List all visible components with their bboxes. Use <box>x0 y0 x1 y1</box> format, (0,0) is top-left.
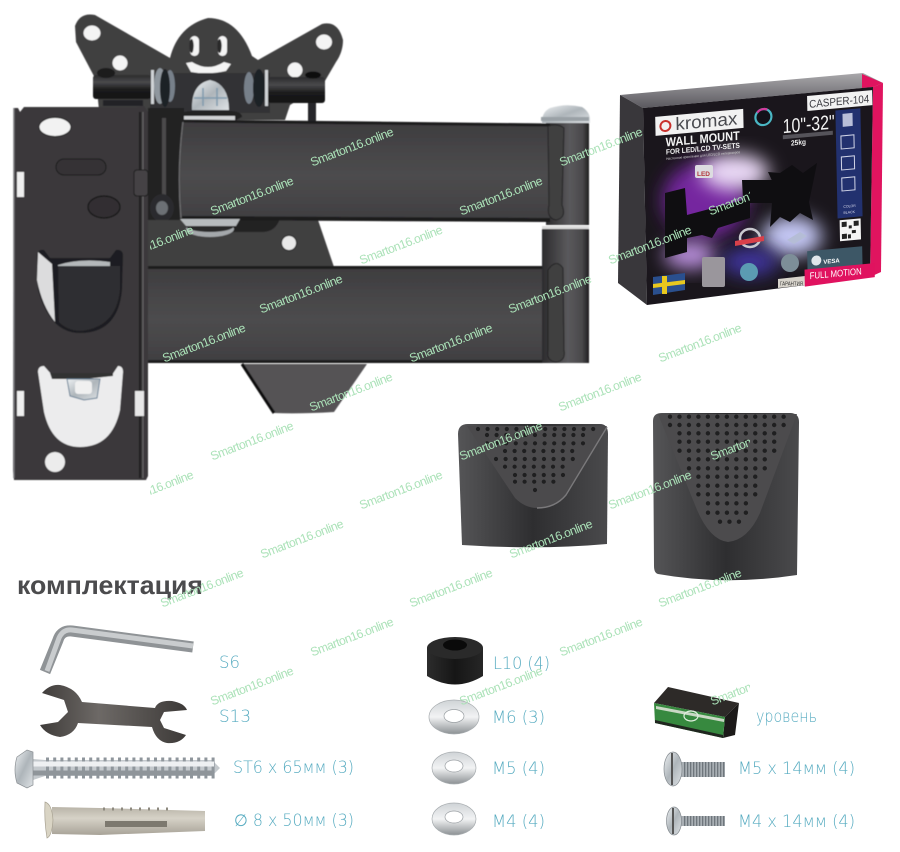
icon: wrench S13 <box>40 685 187 743</box>
watermark layer: Smarton16.online <box>160 321 248 365</box>
watermark layer: Smarton16.online <box>656 321 744 365</box>
keyhole nut <box>67 379 100 400</box>
icon: rubber spacer <box>427 637 483 684</box>
product box <box>618 73 883 305</box>
watermark layer: Smarton16.online <box>208 419 296 463</box>
embossed slot <box>56 159 106 175</box>
QR code <box>840 218 861 241</box>
lower swing arm <box>146 266 552 363</box>
wall mount photo <box>13 14 590 480</box>
side slits <box>17 172 24 197</box>
arm pivot bracket <box>148 108 184 226</box>
watermark layer: Smarton16.online <box>357 468 445 512</box>
fan badge <box>740 263 758 281</box>
box pink side <box>870 83 883 277</box>
Swedish flag <box>653 273 685 295</box>
size underline <box>783 131 833 139</box>
watermark layer: Smarton16.online <box>407 321 495 365</box>
box left side <box>618 95 647 305</box>
label plug: ∅ 8 x 50мм (3) <box>234 811 354 830</box>
label S13: S13 <box>219 707 251 726</box>
round logo <box>735 229 764 247</box>
icon: bolt M4 <box>666 807 725 835</box>
watermark layer: Smarton16.online <box>158 566 246 610</box>
label bolt M4: M4 x 14мм (4) <box>738 812 855 831</box>
full motion banner <box>805 263 875 287</box>
watermark layer: Smarton16.online <box>457 419 545 463</box>
upper washers <box>180 219 240 226</box>
headline: WALL MOUNT <box>666 129 740 149</box>
label M4: M4 (4) <box>492 812 545 831</box>
LED badge: LED <box>697 171 710 178</box>
watermark layer: Smarton16.online <box>708 664 796 708</box>
watermark layer: Smarton16.online <box>706 174 794 218</box>
box front background <box>643 87 873 305</box>
centre bolt <box>178 80 242 121</box>
watermark layer: Smarton16.online <box>457 174 545 218</box>
LED badge <box>695 165 713 178</box>
embossed oval <box>88 196 120 218</box>
label M5: M5 (4) <box>492 759 545 778</box>
headline <box>666 129 740 161</box>
icon: spirit level <box>654 687 739 738</box>
warranty badge <box>778 276 805 288</box>
icon: wood screw <box>15 750 220 788</box>
upper swing arm <box>179 121 550 220</box>
watermark layer: Smarton16.online <box>656 566 744 610</box>
accessory cap right <box>653 413 799 580</box>
specification column <box>835 108 863 218</box>
specification column: BLACK <box>843 210 856 215</box>
label bolt M5: M5 x 14мм (4) <box>738 759 855 778</box>
180 degree pictogram <box>788 232 806 244</box>
watermark layer: Smarton16.online <box>507 517 595 561</box>
watermark layer: Smarton16.online <box>708 419 796 463</box>
box top face <box>620 73 883 108</box>
label M6: M6 (3) <box>492 708 545 727</box>
icon: hex key S6 <box>45 630 193 672</box>
hinge <box>541 105 590 363</box>
dots <box>478 429 594 490</box>
upper keyhole <box>37 250 123 333</box>
warranty badge: ГАРАНТИЯ <box>780 282 803 288</box>
label S6: S6 <box>219 653 240 672</box>
watermark layer: Smarton16.online <box>606 223 694 267</box>
product badge <box>702 257 725 287</box>
icon: washer M4 <box>432 803 476 835</box>
icon: bolt M5 <box>664 752 725 786</box>
watermark layer: Smarton16.online <box>606 468 694 512</box>
arm foot bracket <box>242 364 367 413</box>
watermark layer: Smarton16.online <box>357 223 445 267</box>
watermark layer: Smarton16.online <box>506 272 594 316</box>
full motion banner: FULL MOTION <box>810 266 862 282</box>
colour wheel <box>755 108 772 126</box>
box artwork glow and pictures <box>653 154 822 295</box>
headline: Настенное крепление для LED/LCD телевизоров <box>666 150 740 161</box>
top oval hole <box>39 118 71 136</box>
icon: washer M6 <box>429 700 479 734</box>
watermark layer: Smarton16.online <box>557 125 645 169</box>
VESA plate <box>75 14 343 120</box>
accessory cap left <box>458 424 608 547</box>
watermark layer: Smarton16.online <box>308 125 396 169</box>
watermark layer: Smarton16.online <box>556 370 644 414</box>
watermark layer: Smarton16.online <box>308 615 396 659</box>
specification column: COLOR <box>843 204 856 209</box>
watermark layer: Smarton16.online <box>457 664 545 708</box>
slider tube <box>93 68 325 123</box>
watermark layer: Smarton16.online <box>258 517 346 561</box>
size text: 10"-32" <box>782 112 835 138</box>
bottom hole <box>45 452 65 472</box>
dots <box>670 417 785 522</box>
watermark layer: Smarton16.online <box>208 664 296 708</box>
VESA badge <box>807 246 863 271</box>
lower VESA plate <box>148 220 334 267</box>
brand label: kromax <box>675 108 738 134</box>
weld seams <box>548 125 564 362</box>
watermark layer: Smarton16.online <box>108 468 196 512</box>
label spacer: L10 (4) <box>493 654 550 673</box>
wall plate <box>13 106 148 480</box>
model label: CASPER-104 <box>809 93 869 111</box>
VESA plate holes <box>84 26 332 78</box>
watermark layer: Smarton16.online <box>208 174 296 218</box>
watermark layer: Smarton16.online <box>307 370 395 414</box>
mount on box: wall plate <box>665 163 817 258</box>
watermark layer: Smarton16.online <box>257 272 345 316</box>
label level: уровень <box>756 707 817 726</box>
lens badge <box>781 254 799 272</box>
box front labels <box>655 90 876 300</box>
VESA badge: VESA <box>823 258 840 266</box>
icon: washer M5 <box>432 752 476 784</box>
brand label <box>655 108 744 136</box>
label screw: ST6 x 65мм (3) <box>233 758 354 777</box>
icon: wall plug <box>45 802 205 838</box>
weight text: 25kg <box>791 137 806 148</box>
watermark layer: Smarton16.online <box>557 615 645 659</box>
watermark layer <box>150 130 750 704</box>
lower keyhole <box>38 366 123 447</box>
box pink top corner <box>862 74 883 88</box>
watermark layer: Smarton16.online <box>108 223 196 267</box>
headline: FOR LED/LCD TV-SETS <box>666 141 740 156</box>
watermark layer: Smarton16.online <box>407 566 495 610</box>
section title: комплектация <box>17 570 203 600</box>
